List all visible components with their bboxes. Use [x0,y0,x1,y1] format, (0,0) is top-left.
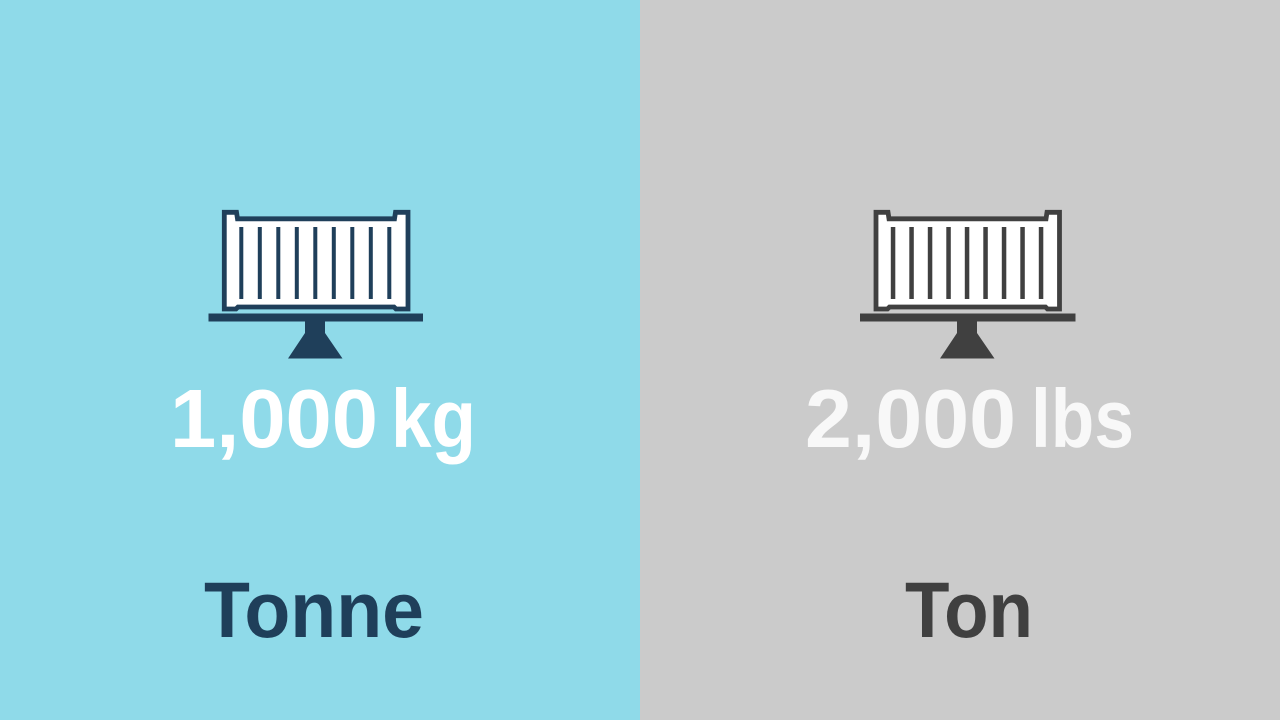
value: 2,000 lbs: 2,000 [805,372,1016,465]
label: Ton: Ton [905,565,1033,654]
panel: tonne [0,0,640,720]
value: 1,000 kg: kg [391,372,476,465]
value: 1,000 kg: 1,000 [170,372,378,465]
panel: ton [640,0,1280,720]
label: Tonne: Tonne [204,565,424,654]
value: 2,000 lbs [805,372,1134,465]
value: 2,000 lbs: lbs [1031,372,1134,465]
icon: container on scale (tonne) [208,212,423,358]
icon: container on scale (ton) [860,212,1076,358]
value: 1,000 kg [170,372,476,465]
